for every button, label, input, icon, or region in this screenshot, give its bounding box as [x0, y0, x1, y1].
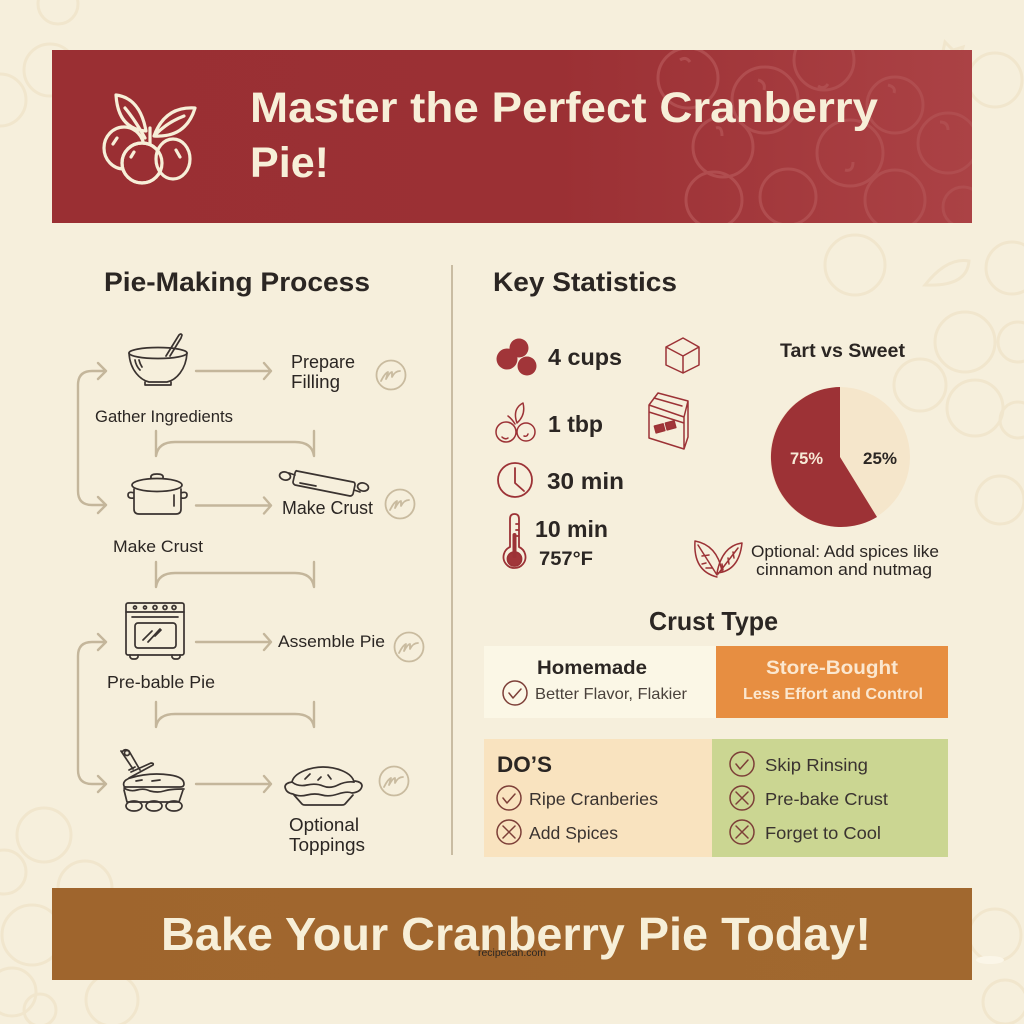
label: prepare filling: Prepare [291, 352, 355, 372]
card: store-bought: Store-Bought [766, 657, 899, 679]
item: pre-bake crust: Pre-bake Crust [765, 789, 888, 809]
icon: cherries with leaf [496, 403, 535, 442]
footer banner: recipecan.com [478, 948, 546, 959]
card: homemade [484, 646, 716, 718]
card: homemade: Homemade [537, 657, 647, 679]
loop arrow top [78, 363, 106, 513]
icon: berries [496, 338, 536, 376]
stat: 1 tbp: 1 tbp [548, 411, 603, 437]
chart: tart vs sweet pie: 25% [863, 449, 897, 468]
stat: 4 cups: 4 cups [548, 344, 622, 370]
icon: rolling pin [279, 471, 369, 496]
divider [451, 265, 453, 855]
chart: tart vs sweet pie: Tart vs Sweet [780, 341, 906, 362]
label: optional toppings: Optional [289, 815, 359, 835]
stat: 30 min [498, 463, 624, 497]
card: homemade: Better Flavor, Flakier [535, 686, 688, 703]
icon: mixing bowl [129, 334, 187, 385]
label: gather ingredients: Gather Ingredients [95, 408, 233, 426]
heading: process: Pie-Making Process [104, 267, 370, 297]
item: pre-bake crust [730, 786, 888, 810]
title [250, 84, 878, 187]
label: prepare filling: Filling [291, 372, 340, 392]
heading: key statistics: Key Statistics [493, 267, 677, 297]
icon: clock [498, 463, 532, 497]
stat: 10 min: 10 min [535, 516, 608, 542]
badge [376, 360, 406, 390]
stat: 4 cups [496, 338, 622, 376]
item: forget to cool [730, 820, 881, 844]
label: make crust: Make Crust [282, 498, 373, 518]
chart: tart vs sweet pie: 75% [790, 449, 823, 468]
header banner [52, 50, 972, 223]
chart: tart vs sweet pie [770, 341, 910, 527]
note: optional spices [695, 541, 939, 579]
panel: do's [484, 739, 712, 857]
icon: cube [666, 338, 699, 373]
panel: don'ts [712, 739, 948, 857]
arrow [196, 498, 271, 514]
label: optional toppings: Toppings [289, 835, 365, 855]
item: ripe cranberries: Ripe Cranberies [529, 789, 658, 809]
title: Master the Perfect Cranberry [250, 84, 878, 132]
item: ripe cranberries [497, 786, 658, 810]
icon: pot [128, 474, 187, 514]
label: assemble pie: Assemble Pie [278, 632, 385, 651]
stat: 10 min [504, 514, 608, 570]
icon: cranberries [104, 95, 195, 183]
card: store-bought: Less Effort and Control [743, 686, 923, 703]
badge [394, 632, 424, 662]
icon: check [503, 681, 527, 705]
label: pre-bable pie: Pre-bable Pie [107, 672, 215, 692]
icon: finished pie [285, 767, 362, 805]
bracket [156, 562, 314, 587]
heading: crust type: Crust Type [649, 606, 778, 636]
card: store-bought [716, 646, 948, 718]
label: make crust: Make Crust [113, 537, 203, 556]
item: add spices: Add Spices [529, 823, 618, 843]
stat: 1 tbp [496, 403, 603, 442]
icon: oven [126, 603, 184, 659]
footer banner [52, 888, 972, 980]
icon: pie with tool [121, 750, 184, 811]
badge [380, 766, 408, 796]
arrow [196, 634, 271, 650]
icon: thermometer [504, 514, 526, 568]
arrow [196, 363, 271, 379]
bracket [156, 702, 314, 727]
label: optional toppings [289, 815, 365, 855]
item: add spices [497, 820, 618, 844]
stat: 10 min: 757°F [539, 549, 593, 570]
stat: 30 min: 30 min [547, 468, 624, 494]
item: skip rinsing: Skip Rinsing [765, 755, 868, 775]
icon: leaves [695, 541, 742, 577]
badge [386, 490, 414, 518]
label: prepare filling [291, 352, 355, 392]
note: optional spices: Optional: Add spices like [751, 542, 939, 561]
bracket [156, 431, 314, 456]
loop arrow bottom [78, 634, 106, 792]
panel: pie-making process [78, 267, 424, 855]
arrow [196, 776, 271, 792]
item: skip rinsing [730, 752, 868, 776]
panel: do's: DO’S [497, 752, 552, 777]
title: Pie! [250, 139, 329, 187]
icon: sugar box [649, 393, 688, 449]
note: optional spices: cinnamon and nutmag [756, 560, 932, 579]
item: forget to cool: Forget to Cool [765, 823, 881, 843]
panel: key statistics [484, 267, 948, 857]
footer banner: Bake Your Cranberry Pie Today! [161, 908, 871, 960]
